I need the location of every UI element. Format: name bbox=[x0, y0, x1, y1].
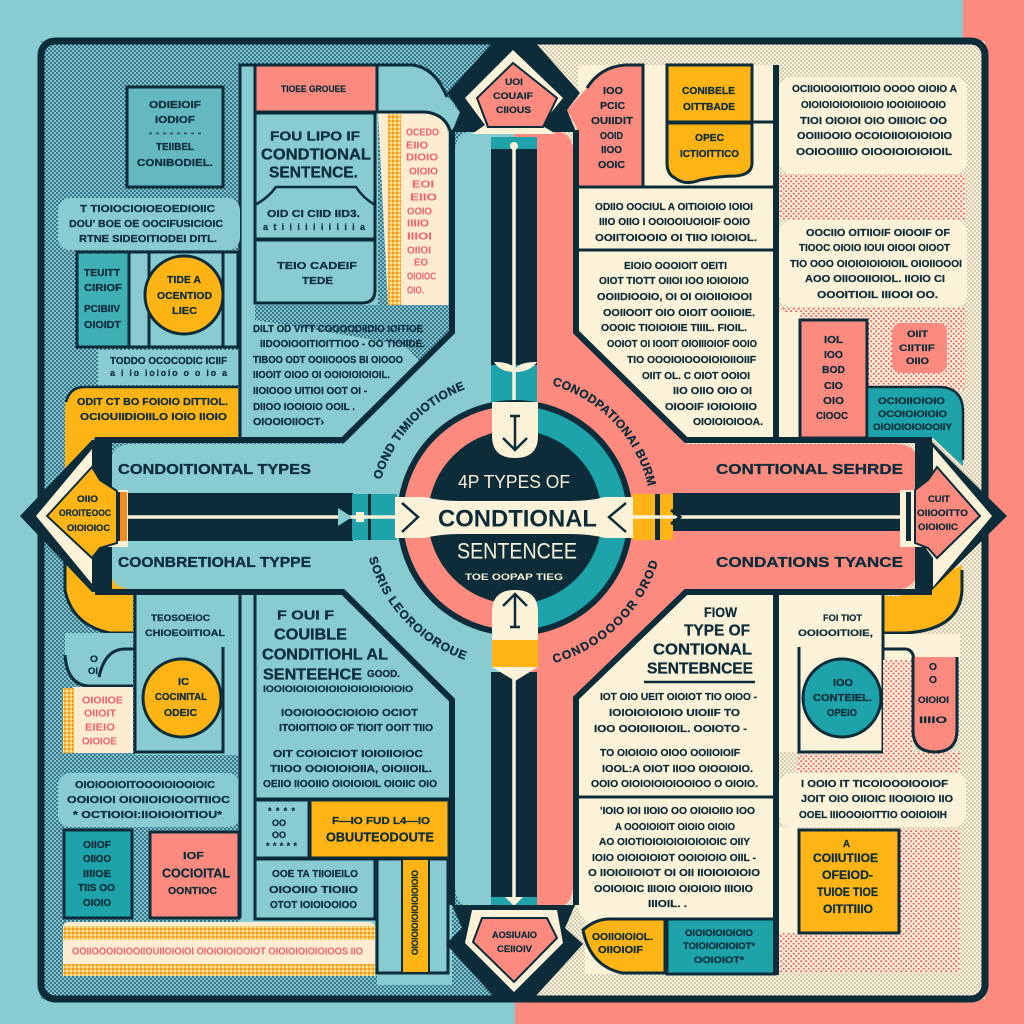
heading bbox=[644, 604, 755, 682]
body text block: OOIIDIOOIO, OI OI OIOIIOIOOI bbox=[597, 291, 752, 303]
text pill: OIOIOOIOITOOOIOIOOIOIC bbox=[75, 779, 215, 791]
arm labels: COONBRETIOHAL TYPPE bbox=[118, 555, 311, 571]
coral column: IOL bbox=[824, 334, 844, 346]
coral tab: OOID bbox=[600, 130, 623, 142]
body text block: IIOOIT OIOO OI OOIOIOIOIOIL. bbox=[253, 369, 390, 381]
vertical divider bbox=[773, 592, 779, 975]
pink dotted area bbox=[780, 660, 960, 973]
right arrow tip: OIIOOITTO bbox=[917, 508, 968, 518]
right arrow tip: CUIT bbox=[928, 494, 951, 504]
lower card: TEIO CADEIF bbox=[277, 260, 358, 272]
heading card: OID CI CIID IID3. bbox=[267, 208, 360, 220]
yellow card: COIIUTIIOE bbox=[813, 853, 878, 865]
small card: OO bbox=[272, 818, 286, 828]
body text block: IIOIOOO UITIOI OOT OI - bbox=[253, 385, 367, 397]
cream side note with pink text: EIIO bbox=[406, 140, 428, 152]
arm labels: CONTTIONAL SEHRDE bbox=[716, 462, 903, 478]
yellow circle: OCENTIOD bbox=[157, 290, 212, 302]
coral tab: IIOO bbox=[601, 144, 622, 156]
pink dotted band bbox=[780, 174, 965, 220]
small curved card bbox=[65, 633, 135, 686]
coral card: IOF bbox=[183, 850, 205, 862]
title banner bbox=[395, 497, 633, 538]
yellow banner note: OCIOUIIDIOIILO IOIO IIOIO bbox=[80, 411, 227, 423]
cream side note with pink text bbox=[377, 112, 452, 305]
title banner: CONDTIONAL bbox=[438, 506, 597, 532]
central medallion bbox=[395, 400, 633, 640]
vertical connector bar bbox=[491, 137, 538, 908]
circle card bbox=[135, 592, 226, 752]
panel: top-left quadrant bbox=[58, 65, 462, 470]
coral column: OIO bbox=[823, 395, 844, 407]
text pill: T TIOIOCIOIOEOEDIOIIC bbox=[80, 203, 215, 215]
small square note: ODIEIOIF bbox=[149, 99, 202, 111]
coral card bbox=[150, 832, 239, 918]
teal card: OIIOF bbox=[83, 839, 112, 851]
yellow card: OITITIIIO bbox=[823, 904, 873, 916]
coral tab: OUIIDIT bbox=[591, 115, 634, 127]
text pill: JOIT OIO OIIOIC IIOOIOIO IIO bbox=[801, 793, 953, 805]
text card bbox=[255, 859, 375, 919]
body text block two: 'IOIO IOI IIOIO OO OIOIOIIO IOO bbox=[600, 805, 755, 817]
small square note: IODIOF bbox=[155, 114, 196, 126]
text pill one: TIOI OIOIOI OIO OIIIOIC OO bbox=[800, 115, 947, 127]
arm labels: CONDOITIONTAL TYPES bbox=[118, 462, 311, 478]
top capsule with down arrow bbox=[492, 402, 538, 458]
vertical yellow tab bbox=[377, 859, 448, 973]
cream side note with pink text: DIOIO bbox=[406, 152, 438, 164]
body text block two bbox=[588, 805, 760, 910]
yellow card top bbox=[667, 65, 752, 122]
text pill bbox=[779, 773, 966, 827]
title line three: SENTENCEE bbox=[457, 538, 577, 564]
text pill: OOEL IIIOOOIOITTIO OOIOIOIH bbox=[799, 809, 947, 821]
coral tab: PCIC bbox=[600, 100, 625, 112]
coral column: IOO bbox=[824, 349, 843, 361]
cream note with pink text: OIOIOE bbox=[82, 736, 117, 748]
body text block one: IOIOIOIOIOIO UIOIIF TO bbox=[609, 707, 740, 719]
teal corner card: OIOIOIOIOIOOIIY bbox=[873, 422, 952, 432]
small card bbox=[255, 800, 309, 858]
heading card: TIIOO OOIOIOIOIIA, OIOIIOIL. bbox=[270, 763, 432, 775]
coral column: BOD bbox=[822, 364, 845, 376]
yellow card: F—IO FUD L4—IO bbox=[332, 815, 430, 827]
text pill one: OOIIIOOIO OCOIOIIOIOIOIOIO bbox=[797, 130, 952, 142]
body text block: OOOIC TIOIOIOIE TIIIL. FIOIL. bbox=[601, 322, 747, 334]
curved arm labels: CONDOOOOOR OROD bbox=[552, 560, 657, 662]
cream column with circle: OOIOOITIOIE, bbox=[798, 628, 873, 638]
heading: CONTIONAL bbox=[653, 642, 752, 658]
cream side note with pink text: OCEDO bbox=[406, 128, 439, 138]
coral capsule: O bbox=[929, 674, 937, 686]
text pill one: OIOIOIOIOIOIIOIO IOOIOIIOOIO bbox=[801, 99, 946, 111]
row: dark card and circle callout: TEUITT bbox=[84, 267, 121, 279]
cream side note with pink text: OOIO bbox=[407, 206, 432, 218]
small card: * * * * * bbox=[266, 841, 297, 851]
yellow card bottom: ICTIOITTICO bbox=[680, 148, 739, 160]
yellow card bottom: OPEC bbox=[695, 132, 724, 144]
yellow card bbox=[310, 800, 449, 858]
body text block two: OOIOIOIC IIIOIO OIOIOIO IIIOIO bbox=[594, 883, 753, 895]
teal circle: IOO bbox=[833, 677, 853, 689]
text card: OTOT IOIOIOOIOO bbox=[270, 899, 357, 911]
yellow circle: TIDE A bbox=[167, 274, 201, 286]
body text block bbox=[597, 260, 763, 428]
heading card: CONDITIOHL AL bbox=[262, 646, 388, 664]
text card: OOE TA TIIOIEILO bbox=[272, 868, 358, 880]
body text block: DIIOO IOOIOIO OOIL . bbox=[253, 401, 355, 413]
bottom dotted strip bbox=[63, 922, 375, 976]
heading card: IOOIOIOOCIOIOIO OCIOT bbox=[281, 707, 419, 719]
cream side note with pink text: IIIOI bbox=[407, 232, 432, 242]
cream side note with pink text: OIIOI bbox=[407, 246, 431, 256]
cream note with pink text: OIOIIOE bbox=[82, 696, 123, 706]
coral badge bbox=[892, 323, 947, 373]
teal card: TOIOIOIOIOIOT* bbox=[683, 941, 756, 951]
body text block: IIDOOIOOITIOITTIOO - OO TIOIIDE. bbox=[260, 338, 425, 350]
text pill: RTNE SIDEOITIODEI DITL. bbox=[79, 233, 217, 245]
small square note: - - - - - - - - bbox=[149, 128, 201, 138]
left arrow tip: OROITEOOC bbox=[59, 508, 111, 518]
yellow banner note: ODIT CT BO FOIOIO DITTIOL. bbox=[77, 396, 228, 408]
subtitle: TOE OOPAP TIEG bbox=[465, 572, 563, 582]
heading card: GOOD. bbox=[367, 668, 400, 680]
text pill two bbox=[779, 220, 967, 307]
cream side note with pink text: EO bbox=[414, 258, 428, 268]
arm labels bbox=[118, 462, 903, 571]
body text block two: AO OIOTIOIOIOIOIOIOIOIC OIIY bbox=[599, 836, 750, 848]
panel: bottom-right quadrant bbox=[575, 565, 966, 975]
text card: OIOOIIO TIOIIO bbox=[269, 884, 358, 896]
row: dark card and circle callout: CIRIOF bbox=[84, 282, 123, 294]
heading card: IOOIOIOIOIOIOIOIOIOIOIOIOIO bbox=[263, 684, 413, 694]
vertical divider bbox=[773, 65, 779, 440]
yellow circle bbox=[145, 256, 223, 334]
cross outlines bbox=[95, 130, 932, 905]
yellow circle: ODEIC bbox=[164, 707, 197, 719]
coral tab bbox=[567, 65, 643, 187]
small curved card: OI bbox=[88, 666, 98, 676]
teal circle: CONTEIEL. bbox=[813, 692, 872, 704]
heading card: COUIBLE bbox=[274, 626, 347, 644]
yellow tab: OOIIOIOIOL. bbox=[592, 931, 653, 943]
right-side rules bbox=[578, 122, 775, 250]
dotted accent bbox=[255, 305, 449, 362]
text card: OOIITOIOOIO OI TIIO IOIOIOL. bbox=[595, 232, 757, 244]
text pill two: TIOOC OIOIO IOUI OIOOI OIOOT bbox=[799, 242, 951, 254]
coral capsule bbox=[913, 657, 957, 752]
bottom arrow tip: AOSIUAIO bbox=[492, 930, 537, 940]
cream column bbox=[779, 827, 798, 933]
body text block: OIIT OL. C OIOT OOIOI bbox=[642, 370, 750, 382]
circle card: CHIOEOIITIOAL bbox=[145, 628, 226, 638]
right arrow tip: OIOIOIIC bbox=[918, 522, 959, 532]
body text block one: TO OIOIOIO OIOO OOIIOIOIF bbox=[600, 747, 741, 759]
cream side note with pink text: OIO. bbox=[407, 286, 424, 296]
teal card: OIOIO bbox=[83, 897, 111, 909]
text card: ODIIO OOCIUL A OITIOIOIO IOIOI bbox=[595, 201, 753, 213]
text card: IIIO OIIO I OOIOOIUOIOIF OOIO bbox=[599, 216, 750, 228]
teal circle bbox=[803, 659, 881, 737]
horizontal connector bar bbox=[125, 493, 902, 541]
text pill two: OOOITIOIL IIIOOI OO. bbox=[817, 289, 938, 301]
teal card bbox=[64, 830, 132, 918]
pink dotted area bbox=[782, 308, 966, 438]
bottom arrow tip: CEIIOIV bbox=[497, 944, 532, 954]
body text block: OOIOT OI IOOIT OIOIIIOIOF OOIO bbox=[607, 338, 757, 350]
heading card: CONDTIONAL bbox=[261, 146, 371, 164]
yellow circle bbox=[143, 659, 221, 737]
coral card: COCIOITAL bbox=[162, 866, 230, 880]
text pill: OOIOIOI OIOIIOIOIOOITIIOC bbox=[67, 794, 230, 806]
curved arm labels: SORIS LEOROIOROUE bbox=[370, 556, 468, 660]
cream column bbox=[779, 312, 800, 438]
bottom dotted strip: OOIIOOOIOIOOIIOUIIOIOIOI OIOIOIOIOOIOT OIOIOIOIOIOIOOS IIO bbox=[72, 946, 363, 958]
yellow banner note bbox=[65, 387, 238, 470]
body text block one: IOO OOIOIIOIOIL. OOIOTO - bbox=[594, 723, 748, 735]
body text block one: IOT OIO UEIT OIOIOT TIO OIOO - bbox=[600, 691, 757, 703]
heading card: SENTEEHCE bbox=[263, 666, 362, 684]
heading card: OIT COIOICIOT IOIOIIOIOC bbox=[273, 748, 423, 760]
curved arm labels bbox=[370, 378, 657, 662]
text card bbox=[578, 187, 775, 244]
coral column bbox=[800, 320, 867, 438]
text pill: * OCTIOIOI:IIOIOIOITIOU* bbox=[73, 809, 223, 821]
heading card: F OUI F bbox=[277, 608, 334, 622]
small curved card: O bbox=[90, 654, 98, 664]
body text block one: IOOL:A OIOT IIOO OIOOIOIO. bbox=[602, 763, 753, 775]
body text block two: IIIOIL. . bbox=[648, 898, 687, 910]
coral tab: IOO bbox=[603, 85, 623, 97]
heading card bbox=[255, 113, 375, 239]
cream side note with pink text: EOI bbox=[412, 180, 434, 190]
central cross: teal arm bbox=[110, 130, 514, 908]
circle card: TEOSOEIOC bbox=[151, 613, 211, 623]
cream column with circle: FOI TIOT bbox=[823, 613, 863, 623]
body text block: OIOT TIOTT OIIOI IOO IOIOIOIO bbox=[599, 275, 749, 287]
text pill: DOU' BOE OE OOCIFUSICIOIC bbox=[69, 218, 223, 230]
body text block: TIO OOOIOIOOOIOIOIIOIIF bbox=[627, 354, 757, 366]
top arrow tip: CIIOUS bbox=[496, 105, 531, 115]
right arrow tip bbox=[900, 440, 1007, 592]
left arrow tip: OIIO bbox=[77, 494, 98, 504]
cream note with pink text bbox=[63, 687, 133, 753]
yellow tab: OIIOIOIF bbox=[598, 944, 644, 956]
yellow card bbox=[799, 830, 899, 933]
yellow card: A bbox=[843, 838, 850, 850]
small square note bbox=[127, 87, 223, 187]
coral badge: OIIT bbox=[907, 329, 929, 339]
small card: * * * * bbox=[268, 806, 295, 816]
yellow corner shape bbox=[65, 560, 133, 633]
small square note: CONIBODIEL. bbox=[137, 157, 213, 169]
body text block: TIBOO ODT OOIIOOOS BI OIOOO bbox=[253, 354, 403, 366]
yellow circle: COCINITAL bbox=[155, 691, 208, 703]
coral capsule: O bbox=[929, 661, 937, 673]
coral tab: OOIC bbox=[598, 159, 625, 171]
left arrow tip bbox=[20, 440, 128, 592]
body text block: EIOIO OOOIOIT OEITI bbox=[624, 260, 727, 272]
yellow tab bbox=[583, 919, 665, 973]
yellow card top: OITTBADE bbox=[683, 101, 735, 113]
text pill one: OOIOOIIIIO OIOOIOIOIOIOIL bbox=[796, 146, 953, 158]
panel: top-right quadrant bbox=[567, 65, 967, 466]
small square note: TEIIBEL bbox=[156, 141, 195, 153]
central cross: coral arm bbox=[514, 130, 918, 908]
teal strip note: a i io ioioio o o io a bbox=[110, 368, 228, 378]
yellow circle: IC bbox=[178, 676, 189, 688]
text pill one: OCIIOIOOIOITIOIO OOOO OIOIO A bbox=[792, 83, 957, 95]
panel: bottom-left quadrant bbox=[58, 560, 452, 985]
teal strip note: TODDO OCOCODIC ICIIF bbox=[110, 355, 228, 367]
teal card: OOIOIOT* bbox=[694, 955, 745, 965]
cream note with pink text: EIEIO bbox=[85, 722, 115, 734]
teal corner card: OCIOIIOIOIO bbox=[878, 396, 945, 406]
cream side note with pink text: OIOIO bbox=[409, 166, 438, 178]
heading card: SENTENCE. bbox=[269, 164, 358, 182]
teal card: TIIS OO bbox=[78, 882, 115, 894]
text pill one bbox=[779, 77, 967, 174]
teal corner card: OCOIOIOIOIO bbox=[878, 409, 947, 419]
arm labels: CONDATIONS TYANCE bbox=[716, 555, 903, 571]
cream column with circle bbox=[779, 595, 960, 752]
text pill bbox=[58, 198, 240, 250]
coral header box: TIOEE GROUEE bbox=[281, 84, 346, 94]
heading card: FOU LIPO IF bbox=[270, 128, 360, 144]
cream side note with pink text: OIOIOC bbox=[407, 272, 436, 282]
coral badge: OIIO bbox=[906, 356, 929, 366]
row: dark card and circle callout: PCIBIIV bbox=[84, 303, 120, 315]
text pill two: OOCIIO OITIIOIF OIOOIF OF bbox=[806, 227, 951, 239]
text pill two: TIO OOO OIOIOIOIOIOIL OIOIIOOOI bbox=[790, 258, 962, 270]
coral header box bbox=[255, 65, 377, 112]
bottom capsule with up arrow bbox=[492, 590, 538, 640]
teal card: OIOIOIOIOIOIO bbox=[685, 928, 753, 938]
cream side note with pink text: IIIIO bbox=[407, 218, 429, 230]
body text block: DILT OD VITT COOOODIIDIO IOITIOE bbox=[253, 323, 423, 335]
curved arm labels: CONODPATIONAI BURM bbox=[553, 378, 656, 486]
dotted accent beside note bbox=[378, 113, 390, 305]
yellow card: OFEIOD- bbox=[822, 870, 873, 882]
top arrow tip: UOI bbox=[505, 77, 523, 87]
coral column: CIOOC bbox=[816, 410, 848, 422]
teal card: OIIOO bbox=[83, 853, 111, 865]
title line one: 4P TYPES OF bbox=[458, 472, 570, 492]
yellow corner shape bbox=[883, 565, 962, 633]
heading card bbox=[240, 595, 452, 918]
heading: FIOW bbox=[704, 604, 738, 620]
body text block bbox=[253, 323, 425, 428]
coral card: OONTIOC bbox=[168, 885, 217, 897]
text pill: I OOIO IT TICOIOOOIOOIOF bbox=[801, 778, 949, 790]
teal corner card bbox=[867, 387, 963, 466]
body text block: OIOIOIOIOOA. bbox=[693, 416, 763, 428]
heading: SENTEBNCEE bbox=[647, 660, 753, 678]
small card: OO bbox=[272, 830, 286, 840]
row: dark card and circle callout bbox=[77, 252, 238, 347]
heading: TYPE OF bbox=[684, 622, 750, 640]
body text block two: A OOOIOIOIT OIOIO OIOIO bbox=[615, 821, 735, 833]
curved arm labels: OOND TIMIOIOTIONE bbox=[374, 381, 465, 479]
body text block: IIO OIIO OIO OI bbox=[673, 385, 752, 397]
coral badge: CIITIIF bbox=[899, 343, 936, 353]
teal strip note bbox=[98, 350, 238, 385]
text pill bbox=[58, 773, 240, 827]
body text block: OIOOIF IOIOIOIIO bbox=[665, 401, 757, 413]
coral column: CIO bbox=[824, 380, 843, 392]
body text block: OOIIOOIT OIO OIOIT OOIIOIE. bbox=[603, 307, 755, 319]
yellow card top: CONIBELE bbox=[682, 85, 735, 97]
body text block: OIOOIOIIOCT› bbox=[253, 416, 325, 428]
row: dark card and circle callout: OIOIDT bbox=[84, 319, 122, 331]
top arrow tip: COUAIF bbox=[493, 91, 534, 101]
yellow card: OBUUTEODOUTE bbox=[326, 830, 434, 844]
text pill two: AOO OIIOOIIOIOL. IIOIO CI bbox=[805, 273, 945, 285]
top arrow tip bbox=[447, 41, 580, 134]
cream note with pink text: OIIOIT bbox=[84, 708, 116, 720]
yellow circle: LIEC bbox=[172, 305, 197, 317]
left arrow tip: OIOIOIOC bbox=[67, 523, 110, 533]
dotted strip bbox=[66, 755, 238, 772]
coral capsule: OIOIOI bbox=[918, 695, 949, 705]
vertical yellow tab: OIOIOIOIOIOIOIOIOIO bbox=[410, 870, 420, 955]
body text block two: O IIOIOIIOIOT OI OII IIOIOIOIOIO bbox=[588, 867, 760, 879]
rule bbox=[578, 796, 776, 798]
lower card: TEDE bbox=[302, 275, 333, 287]
lower card bbox=[255, 240, 375, 303]
teal card bbox=[667, 919, 775, 974]
teal circle: OPEIO bbox=[827, 707, 857, 719]
cream side note with pink text: EIIO bbox=[410, 192, 437, 204]
coral capsule: IIIIO bbox=[919, 715, 947, 725]
bottom arrow tip bbox=[446, 905, 583, 998]
body text block one bbox=[591, 691, 758, 790]
heading card: OEIIO IIOOIIO OIOIOIOIL OIOIIC OIO bbox=[263, 778, 437, 790]
body text block two: IOIO OIOIOIOIOT OOIOIOIO OIIL - bbox=[592, 852, 756, 864]
heading card: a t i i i i i i i i i i a bbox=[263, 222, 366, 232]
yellow card bottom bbox=[667, 123, 752, 183]
body text block one: OOIO OIOIOIOIOIOOIOO O OIOIO. bbox=[591, 778, 758, 790]
heading card: ITOIOITIOIO OF TIOIT OOIT TIIO bbox=[279, 722, 433, 734]
teal card: IIIIOE bbox=[83, 868, 111, 880]
yellow card: TUIOE TIOE bbox=[817, 887, 878, 899]
